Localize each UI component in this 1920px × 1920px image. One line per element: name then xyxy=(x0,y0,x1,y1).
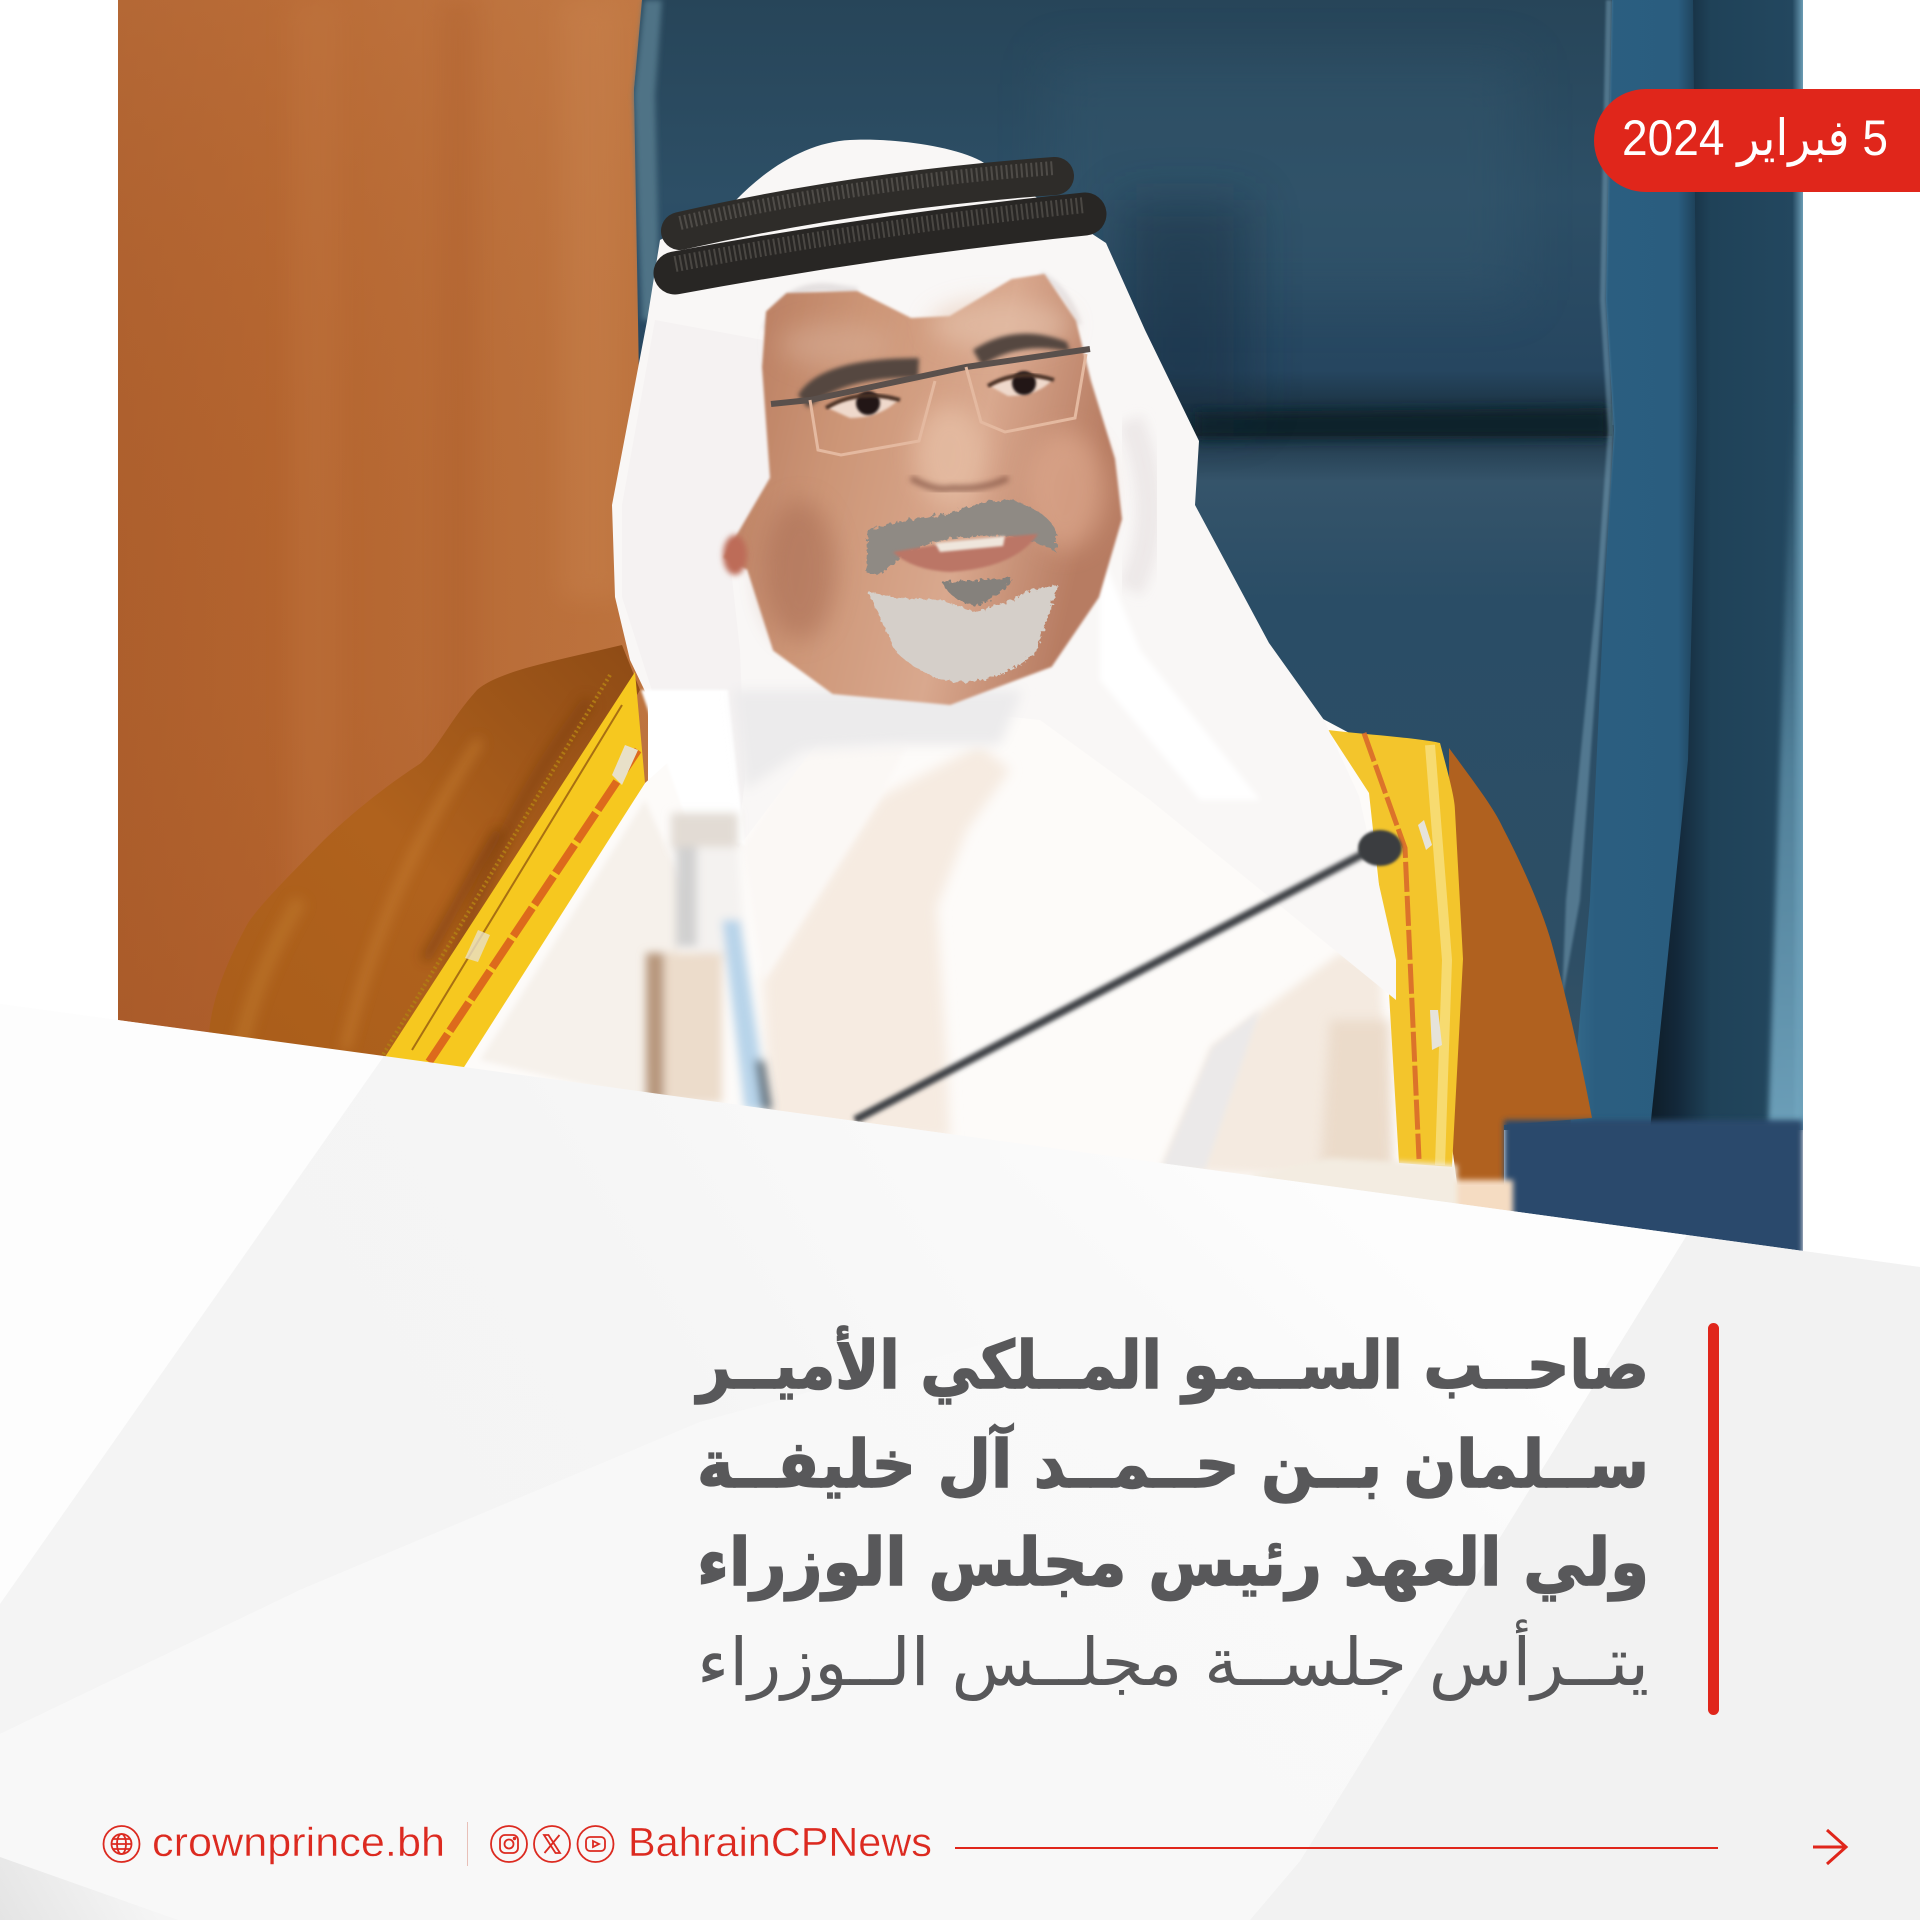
ghutra tail xyxy=(640,688,741,822)
eyebrows xyxy=(798,358,919,408)
collar xyxy=(742,692,1016,781)
red vertical accent bar xyxy=(1708,1323,1719,1715)
right gray facet xyxy=(1250,1235,1920,1920)
date text: 5 فبراير 2024 xyxy=(1622,110,1888,167)
nose shadow xyxy=(911,478,1008,489)
bottom-left corner facet xyxy=(0,1857,178,1920)
date badge xyxy=(1594,89,1920,192)
white thobe and folds xyxy=(464,716,1457,1184)
ear xyxy=(723,535,747,575)
chair back xyxy=(634,0,1803,1130)
white lapel xyxy=(743,747,906,980)
icon: instagram xyxy=(491,1826,527,1862)
soul patch xyxy=(942,578,1012,606)
icon: X xyxy=(534,1826,570,1862)
gold embroidery band left xyxy=(380,672,645,1080)
goatee xyxy=(868,585,1058,682)
cream cup on desk xyxy=(1252,1158,1513,1230)
headline line 3: ولي العهد رئيس مجلس الوزراء xyxy=(697,1524,1649,1602)
centre light facet xyxy=(0,1141,1687,1920)
face xyxy=(723,275,1121,704)
icon: globe xyxy=(104,1826,140,1862)
social handle text: BahrainCPNews xyxy=(628,1819,932,1865)
upper-left white facet xyxy=(0,1004,384,1604)
icon: youtube xyxy=(578,1826,614,1862)
eyes xyxy=(828,396,898,418)
chair bolster right xyxy=(1570,0,1697,1130)
left fold xyxy=(484,805,676,1092)
brown robe left xyxy=(209,645,640,1090)
headline line 1: صاحــب الســمو المــلكي الأميــر xyxy=(694,1325,1649,1405)
cream wedge xyxy=(763,745,1010,1140)
desk in foreground xyxy=(1504,1120,1803,1260)
headline line 2: ســلمان بــن حــمــد آل خليفــة xyxy=(697,1423,1649,1503)
agal black headband xyxy=(675,168,1085,273)
headline text block xyxy=(694,1325,1649,1701)
website text: crownprince.bh xyxy=(152,1819,445,1865)
headline line 4: يتــرأس جلســة مجلــس الــوزراء xyxy=(697,1619,1649,1701)
microphone boom and head xyxy=(855,830,1402,1120)
middle gray facet xyxy=(0,1056,1000,1734)
mouth xyxy=(893,534,1038,572)
gold embroidery band right xyxy=(1328,730,1463,1167)
arrow xyxy=(1813,1830,1846,1864)
wood wall xyxy=(118,0,648,1032)
ghutra headdress xyxy=(612,140,1396,1000)
glass bottle xyxy=(646,813,772,1110)
glasses xyxy=(771,349,1090,455)
brown robe right xyxy=(1449,748,1592,1185)
footer xyxy=(104,1819,1846,1866)
photo: Crown Prince seated in blue chair xyxy=(118,0,1803,1280)
lower white panel with faceted pattern xyxy=(0,1004,1920,1920)
moustache xyxy=(866,500,1056,575)
right bottom fold xyxy=(1204,954,1389,1175)
ghutra inner fold shadow at hairline xyxy=(767,288,857,330)
